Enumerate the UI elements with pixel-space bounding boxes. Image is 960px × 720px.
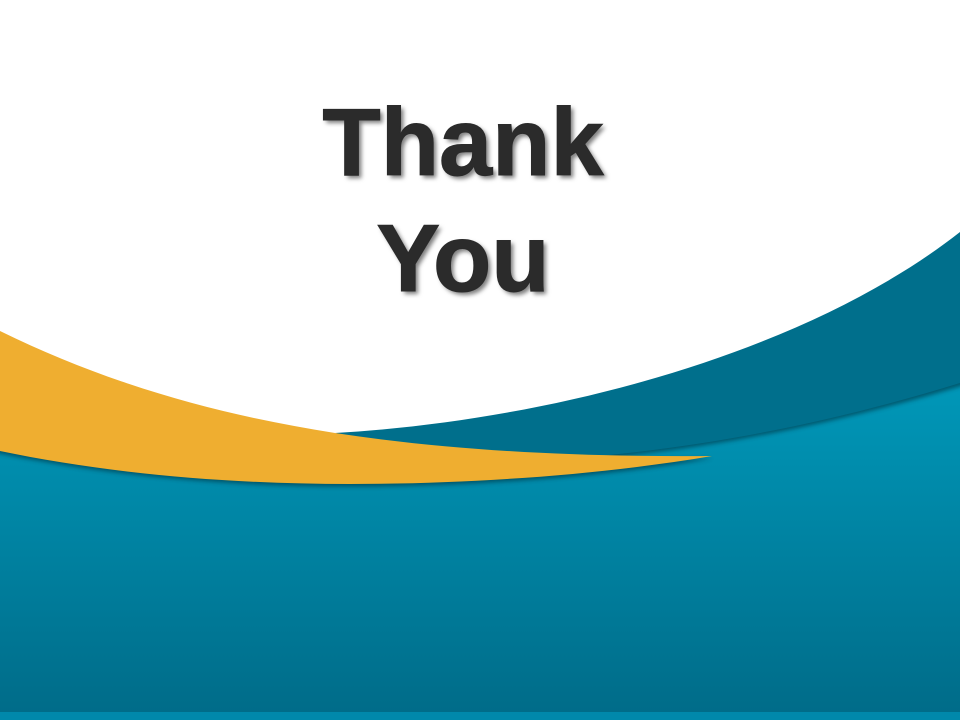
title line: Thank: Thank [322,90,604,196]
main teal wave [0,378,960,712]
background waves [0,232,960,720]
bottom strip [0,712,960,720]
yellow swoosh [0,331,712,484]
title: Thank You [322,90,608,312]
swoosh shadows [0,383,960,489]
title line: You: You [376,206,550,312]
dark teal swoosh [335,232,960,470]
